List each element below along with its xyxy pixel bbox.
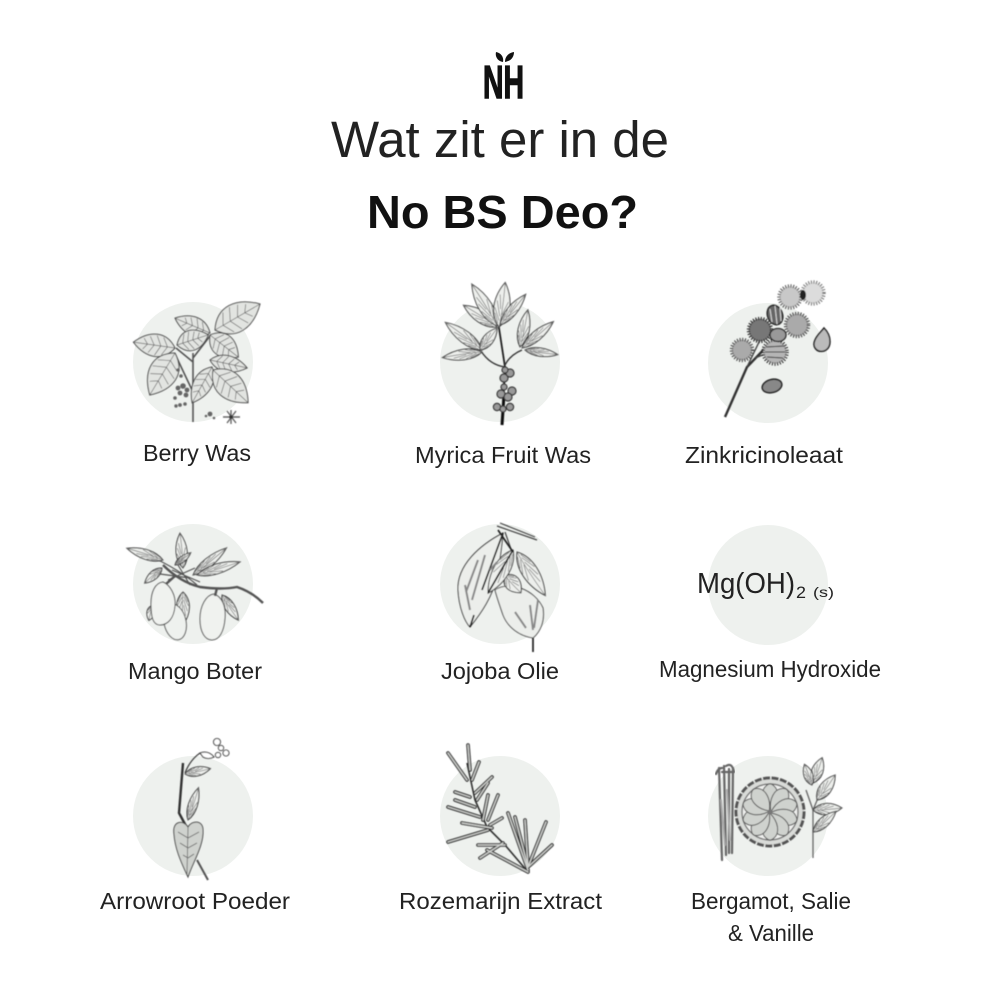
label: Bergamot, Salie & Vanille: Bergamot, Salie	[691, 888, 851, 914]
panel: Myrica Fruit Was	[415, 281, 591, 468]
label: Myrica Fruit Was: Myrica Fruit Was	[415, 442, 591, 468]
icon: bergamot slice	[736, 778, 804, 846]
icon: arrowroot plant	[174, 738, 229, 880]
label: Zinkricinoleaat: Zinkricinoleaat	[685, 442, 844, 468]
icon: rosemary sprig	[448, 745, 552, 872]
icon: myrica branch	[442, 281, 558, 425]
label: Jojoba Olie: Jojoba Olie	[441, 658, 559, 684]
icon: sage sprig	[800, 756, 842, 858]
formula: Mg(OH)2(s): (s)	[813, 584, 834, 600]
icon: mango branch	[125, 533, 263, 642]
panel: Zinkricinoleaat	[685, 282, 844, 468]
panel: Jojoba Olie	[440, 523, 560, 684]
label: Mango Boter: Mango Boter	[128, 658, 262, 684]
title: No BS Deo?	[367, 186, 638, 238]
panel: Bergamot, Salie & Vanille	[691, 756, 851, 946]
leaf: large left	[458, 533, 503, 627]
panel: Mango Boter	[125, 524, 263, 684]
label: Rozemarijn Extract: Rozemarijn Extract	[399, 888, 603, 914]
formula: Mg(OH)2(s): Mg(OH)	[697, 568, 795, 600]
icon: arrowroot flower	[200, 738, 229, 758]
panel: Berry Was	[132, 292, 267, 466]
icon: castor seeds	[761, 328, 830, 395]
panel: Magnesium Hydroxide	[659, 525, 881, 682]
label: Magnesium Hydroxide: Magnesium Hydroxide	[659, 656, 881, 682]
logo: NH with leaves	[483, 52, 524, 108]
panel: Rozemarijn Extract	[399, 745, 603, 914]
panel: Arrowroot Poeder	[100, 738, 290, 914]
label: Bergamot, Salie & Vanille	[691, 888, 851, 946]
formula: Mg(OH)2(s): 2	[796, 583, 806, 602]
logo: NH with leaves: NH	[483, 56, 524, 108]
icon: berry plant	[132, 292, 267, 424]
title: Wat zit er in de	[331, 111, 669, 168]
label: Bergamot, Salie & Vanille: & Vanille	[728, 920, 814, 946]
title	[331, 111, 669, 238]
leaf: large right	[495, 586, 543, 638]
icon: jojoba leaves	[458, 523, 552, 652]
label: Arrowroot Poeder: Arrowroot Poeder	[100, 888, 290, 914]
icon: vanilla pods	[716, 765, 734, 860]
label: Berry Was: Berry Was	[143, 440, 251, 466]
icon: castor plant	[725, 282, 830, 417]
